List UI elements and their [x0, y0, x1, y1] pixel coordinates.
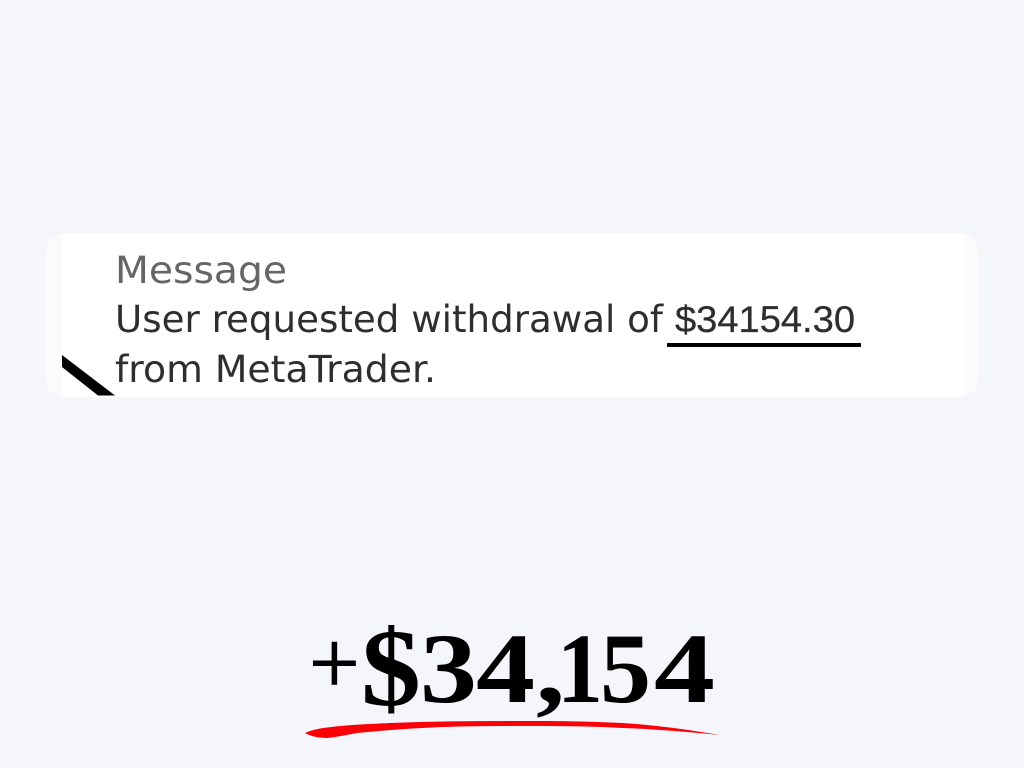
arrow fragment — [62, 355, 115, 396]
big amount: 5 — [600, 613, 651, 724]
heading: Message: Message — [115, 249, 287, 292]
panel: message card — [45, 234, 979, 397]
red underline swoosh — [305, 721, 720, 738]
text: withdrawal amount: $34154.30 — [675, 299, 855, 340]
text: source line: from MetaTrader. — [115, 348, 436, 391]
big amount: $ — [361, 607, 421, 729]
big amount: , — [536, 613, 565, 724]
big amount: 4 — [654, 613, 715, 724]
big amount: + — [309, 614, 360, 713]
big amount — [309, 607, 715, 729]
big amount: 4 — [476, 613, 535, 724]
big amount: 3 — [420, 613, 477, 724]
big amount: 1 — [557, 613, 603, 724]
text: withdrawal request line: User requested withdrawal of — [115, 298, 664, 341]
amount underline — [667, 343, 861, 347]
